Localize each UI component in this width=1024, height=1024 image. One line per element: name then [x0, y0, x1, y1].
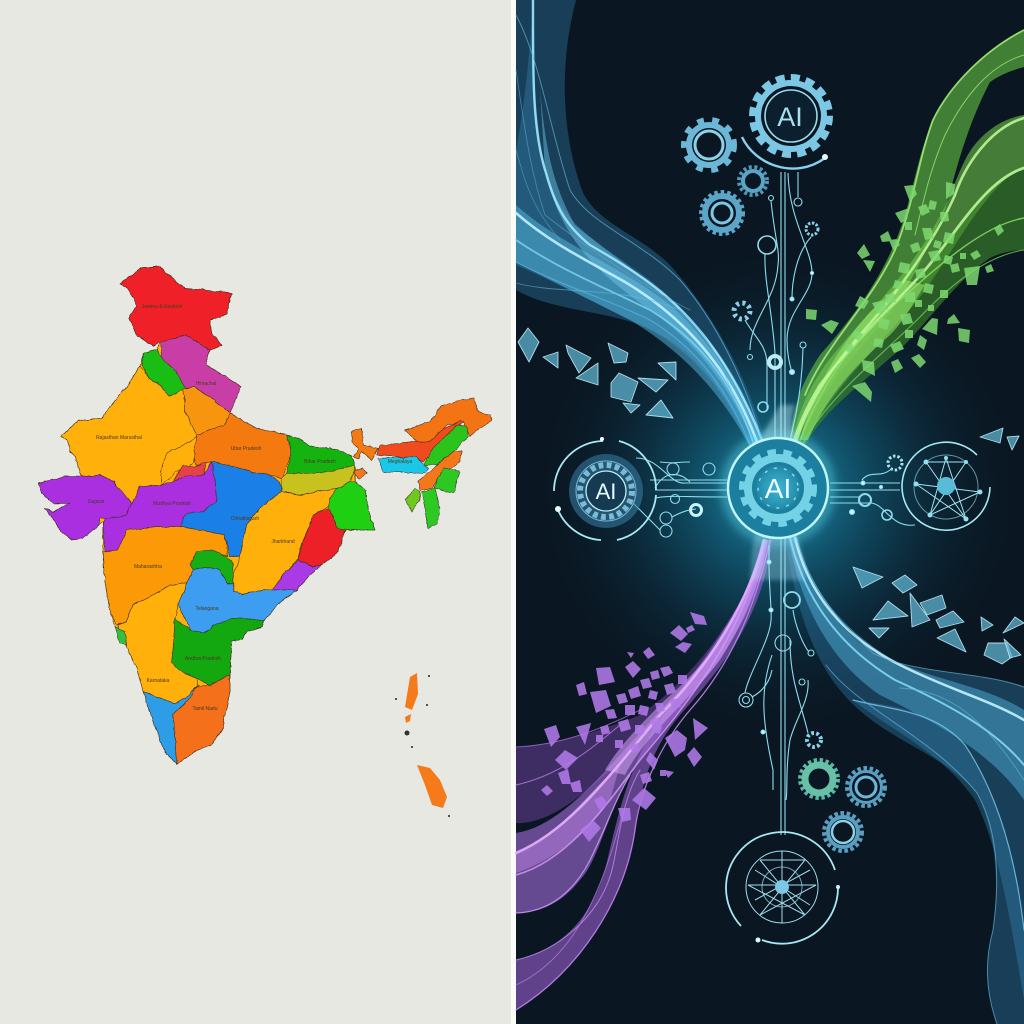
panel: India map [38, 266, 492, 817]
panel: AI network background [516, 0, 1024, 1024]
map: state labels: Telangana [195, 606, 219, 612]
shards: blue bottom-right [853, 567, 1024, 664]
icon: gear left [685, 121, 733, 169]
icon: small gear [739, 167, 767, 195]
map: state labels: Jammu & Kashmir [142, 304, 183, 310]
particles: green fragments [806, 182, 1004, 402]
divider [511, 0, 516, 1024]
panel: map background [0, 0, 511, 1024]
central glow [516, 230, 1024, 750]
circuit lines: right [830, 470, 915, 525]
icon: central AI gear: AI [765, 473, 791, 504]
icon: right network [902, 442, 990, 530]
ribbons: blue top-left [516, 0, 767, 447]
particles: purple fragments [541, 612, 708, 842]
icon: top AI gear [755, 80, 827, 152]
icon: bottom network [726, 832, 840, 944]
icon: left AI gear: AI [596, 479, 616, 504]
map: state labels: Uttar Pradesh [231, 446, 262, 452]
icon: lower gear [701, 192, 743, 234]
ribbons: blue bottom-right [785, 535, 1024, 1024]
map: state labels: Madhya Pradesh [153, 501, 191, 507]
ribbons: green top-right [790, 30, 1024, 445]
map: state labels: Meghalaya [388, 459, 412, 465]
icon: teal gear [800, 760, 838, 798]
circuit lines: top [745, 172, 814, 445]
icon: small gear upper stem [806, 223, 818, 235]
map: state labels: Maharashtra [134, 564, 162, 570]
icon: top AI gear: AI [777, 102, 803, 132]
icon: left AI gear [554, 437, 656, 540]
map: state labels: Andhra Pradesh [185, 656, 221, 662]
map: state labels: Chhattisgarh [231, 516, 259, 522]
map: state labels: Bihar Pradesh [304, 459, 336, 465]
glow dot [822, 154, 828, 160]
shards: right [980, 428, 1019, 450]
icon: small gear lower stem [807, 733, 821, 747]
node: left circuit [690, 504, 702, 516]
arc under AI gear [742, 137, 825, 169]
icon: blue gear right [847, 768, 885, 806]
icon: central AI gear [728, 438, 828, 538]
map: state labels: Rajasthan Marusthal [96, 435, 142, 441]
circuit lines: left [630, 458, 727, 537]
shards: blue top-left [518, 328, 676, 418]
map: state labels: Karnataka [147, 678, 170, 684]
map: islands [395, 673, 450, 817]
map: state labels [88, 304, 412, 712]
icon: blue gear lower [824, 813, 862, 851]
icon: small gear mid stem [734, 303, 750, 319]
map: state labels: Jharkhand [271, 539, 295, 545]
map: coloured states [38, 266, 492, 765]
map: state labels: Gujarat [88, 499, 105, 505]
central hub glow [720, 405, 836, 580]
icon: small gear right [888, 456, 902, 470]
ribbons: purple bottom-left [516, 540, 772, 1010]
map: state labels: Himachal [196, 381, 216, 387]
map: state labels: Tamil Nadu [192, 706, 218, 712]
circuit lines: bottom [739, 530, 814, 835]
